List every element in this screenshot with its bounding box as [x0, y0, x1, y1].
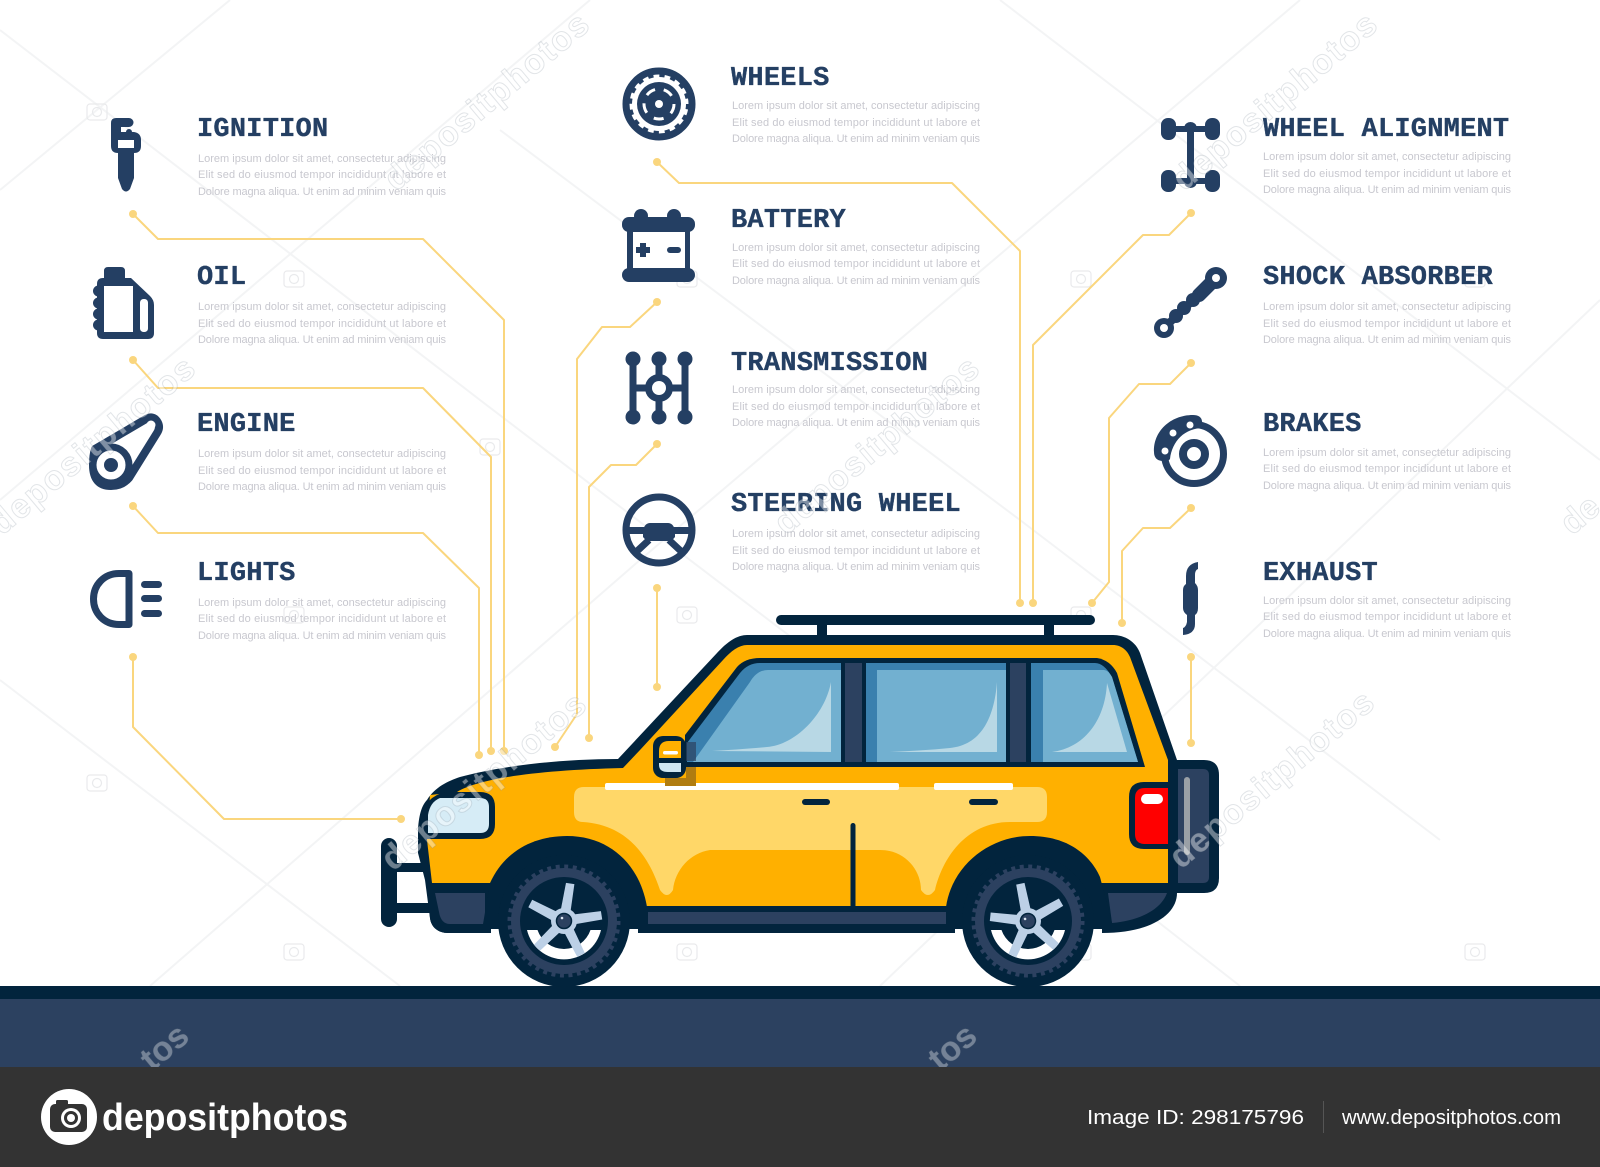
text: battery description: Elit sed do eiusmod tempor incididunt ut labore et	[732, 258, 980, 270]
panel: battery	[622, 206, 980, 287]
door handles	[802, 799, 998, 908]
heading: engine: ENGINE	[197, 410, 296, 440]
text: shock absorber description: Lorem ipsum dolor sit amet, consectetur adipiscing	[1263, 301, 1511, 313]
roof rack	[776, 615, 1095, 638]
icon: shock absorber	[1154, 267, 1227, 338]
underside gaps	[491, 929, 1102, 934]
watermark text: depositphotos	[374, 685, 593, 878]
heading: steering wheel: STEERING WHEEL	[731, 490, 961, 520]
tail light	[1129, 782, 1168, 849]
text: exhaust description: Lorem ipsum dolor sit amet, consectetur adipiscing	[1263, 595, 1511, 607]
panel: shock absorber	[1154, 263, 1512, 346]
text: oil description: Lorem ipsum dolor sit amet, consectetur adipiscing	[198, 301, 446, 313]
text: wheel alignment description: Lorem ipsum dolor sit amet, consectetur adipiscing	[1263, 151, 1511, 163]
panel: exhaust	[1183, 559, 1512, 640]
icon: exhaust pipe	[1183, 562, 1198, 635]
front wheel	[498, 855, 630, 987]
image id: Image ID: 298175796	[1087, 1107, 1304, 1129]
text: ignition description	[198, 153, 446, 198]
car	[381, 615, 1219, 987]
text: shock absorber description: Dolore magna aliqua. Ut enim ad minim veniam quis	[1263, 334, 1512, 346]
text: wheels description: Lorem ipsum dolor sit amet, consectetur adipiscing	[732, 100, 980, 112]
text: transmission description: Elit sed do eiusmod tempor incididunt ut labore et	[732, 401, 980, 413]
text: transmission description: Dolore magna aliqua. Ut enim ad minim veniam quis	[732, 417, 980, 429]
text: wheels description	[732, 100, 980, 145]
text: steering wheel description: Lorem ipsum dolor sit amet, consectetur adipiscing	[732, 528, 980, 540]
text: wheels description: Dolore magna aliqua. Ut enim ad minim veniam quis	[732, 133, 980, 145]
text: lights description: Lorem ipsum dolor sit amet, consectetur adipiscing	[198, 597, 446, 609]
heading: exhaust: EXHAUST	[1263, 559, 1378, 589]
wing mirror	[653, 736, 696, 786]
panel: ignition	[111, 115, 446, 198]
text: ignition description: Dolore magna aliqua. Ut enim ad minim veniam quis	[198, 186, 446, 198]
heading: lights: LIGHTS	[197, 559, 296, 589]
icon: steering wheel	[626, 497, 692, 563]
text: brakes description: Dolore magna aliqua. Ut enim ad minim veniam quis	[1263, 480, 1512, 492]
icon: ignition key	[111, 118, 141, 192]
text: brakes description	[1263, 447, 1512, 492]
sill	[630, 906, 960, 933]
vertical divider at tailgate	[1168, 760, 1178, 893]
icon: battery	[622, 209, 695, 282]
wheel arches	[482, 836, 1112, 930]
heading: oil: OIL	[197, 263, 246, 293]
icon: axle	[1161, 118, 1220, 192]
text: steering wheel description: Elit sed do eiusmod tempor incididunt ut labore et	[732, 545, 980, 557]
heading: wheels: WHEELS	[731, 64, 830, 94]
heading: transmission: TRANSMISSION	[731, 349, 928, 379]
website url: www.depositphotos.com	[1341, 1107, 1561, 1129]
text: oil description: Elit sed do eiusmod tempor incididunt ut labore et	[198, 318, 446, 330]
car body outline	[418, 635, 1177, 933]
side windows	[685, 658, 1145, 767]
icon: engine belt	[93, 417, 159, 486]
text: engine description: Elit sed do eiusmod tempor incididunt ut labore et	[198, 465, 446, 477]
panel: steering wheel	[626, 490, 980, 573]
spare tire	[1160, 760, 1219, 893]
icon: brake disc	[1154, 415, 1224, 484]
text: wheel alignment description: Elit sed do eiusmod tempor incididunt ut labore et	[1263, 168, 1511, 180]
icon: headlight	[94, 574, 162, 624]
text: wheel alignment description: Dolore magna aliqua. Ut enim ad minim veniam quis	[1263, 184, 1512, 196]
text: steering wheel description: Dolore magna aliqua. Ut enim ad minim veniam quis	[732, 561, 980, 573]
heading: shock absorber: SHOCK ABSORBER	[1263, 263, 1493, 293]
text: battery description: Lorem ipsum dolor sit amet, consectetur adipiscing	[732, 242, 980, 254]
heading: wheel alignment: WHEEL ALIGNMENT	[1263, 115, 1509, 145]
text: wheel alignment description	[1263, 151, 1512, 196]
text: exhaust description	[1263, 595, 1512, 640]
text: lights description: Elit sed do eiusmod tempor incididunt ut labore et	[198, 613, 446, 625]
heading: brakes: BRAKES	[1263, 410, 1362, 440]
footer logo icon	[41, 1089, 97, 1145]
text: oil description	[198, 301, 446, 346]
footer logo wordmark: depositphotos	[102, 1097, 348, 1139]
text: oil description: Dolore magna aliqua. Ut enim ad minim veniam quis	[198, 334, 446, 346]
icon: oil canister	[93, 267, 154, 339]
text: engine description: Lorem ipsum dolor sit amet, consectetur adipiscing	[198, 448, 446, 460]
text: engine description: Dolore magna aliqua. Ut enim ad minim veniam quis	[198, 481, 446, 493]
text: shock absorber description	[1263, 301, 1512, 346]
panel: wheels	[626, 64, 980, 145]
text: shock absorber description: Elit sed do eiusmod tempor incididunt ut labore et	[1263, 318, 1511, 330]
car body paint	[427, 645, 1168, 906]
panel: transmission	[626, 349, 980, 429]
text: brakes description: Lorem ipsum dolor sit amet, consectetur adipiscing	[1263, 447, 1511, 459]
text: exhaust description: Dolore magna aliqua. Ut enim ad minim veniam quis	[1263, 628, 1512, 640]
door panel highlight	[574, 787, 1047, 895]
chrome strips	[605, 783, 1013, 790]
panel: brakes	[1154, 410, 1512, 492]
footer bar	[0, 1067, 1600, 1167]
panel: engine	[93, 410, 446, 493]
watermark text: depositphotos	[1165, 5, 1384, 198]
text: exhaust description: Elit sed do eiusmod tempor incididunt ut labore et	[1263, 611, 1511, 623]
text: battery description	[732, 242, 980, 287]
text: wheels description: Elit sed do eiusmod tempor incididunt ut labore et	[732, 117, 980, 129]
heading: battery: BATTERY	[731, 206, 847, 236]
text: ignition description: Elit sed do eiusmod tempor incididunt ut labore et	[198, 169, 446, 181]
panel: lights	[94, 559, 446, 642]
watermark text: tos	[921, 1016, 984, 1078]
rear wheel	[962, 855, 1094, 987]
text: ignition description: Lorem ipsum dolor sit amet, consectetur adipiscing	[198, 153, 446, 165]
icon: gear shift	[626, 352, 692, 424]
text: lights description	[198, 597, 446, 642]
text: steering wheel description	[732, 528, 980, 573]
text: lights description: Dolore magna aliqua. Ut enim ad minim veniam quis	[198, 630, 446, 642]
road	[0, 986, 1600, 1067]
rear bumper	[1100, 883, 1170, 923]
text: transmission description	[732, 384, 980, 429]
icon: wheel	[626, 71, 692, 137]
text: engine description	[198, 448, 446, 493]
text: brakes description: Elit sed do eiusmod tempor incididunt ut labore et	[1263, 463, 1511, 475]
text: transmission description: Lorem ipsum dolor sit amet, consectetur adipiscing	[732, 384, 980, 396]
headlight	[420, 792, 495, 839]
front bumper	[426, 883, 500, 933]
panel: oil	[93, 263, 446, 346]
watermark text: tos	[133, 1016, 196, 1078]
watermark text: depositphotos	[377, 5, 596, 198]
watermark text: depositphotos	[1162, 683, 1381, 876]
text: battery description: Dolore magna aliqua. Ut enim ad minim veniam quis	[732, 275, 980, 287]
heading: ignition: IGNITION	[197, 115, 328, 145]
watermark text: depositphotos	[767, 349, 986, 542]
panel: wheel alignment	[1161, 115, 1512, 196]
bull bar	[381, 838, 433, 927]
connector lines	[129, 158, 1195, 823]
